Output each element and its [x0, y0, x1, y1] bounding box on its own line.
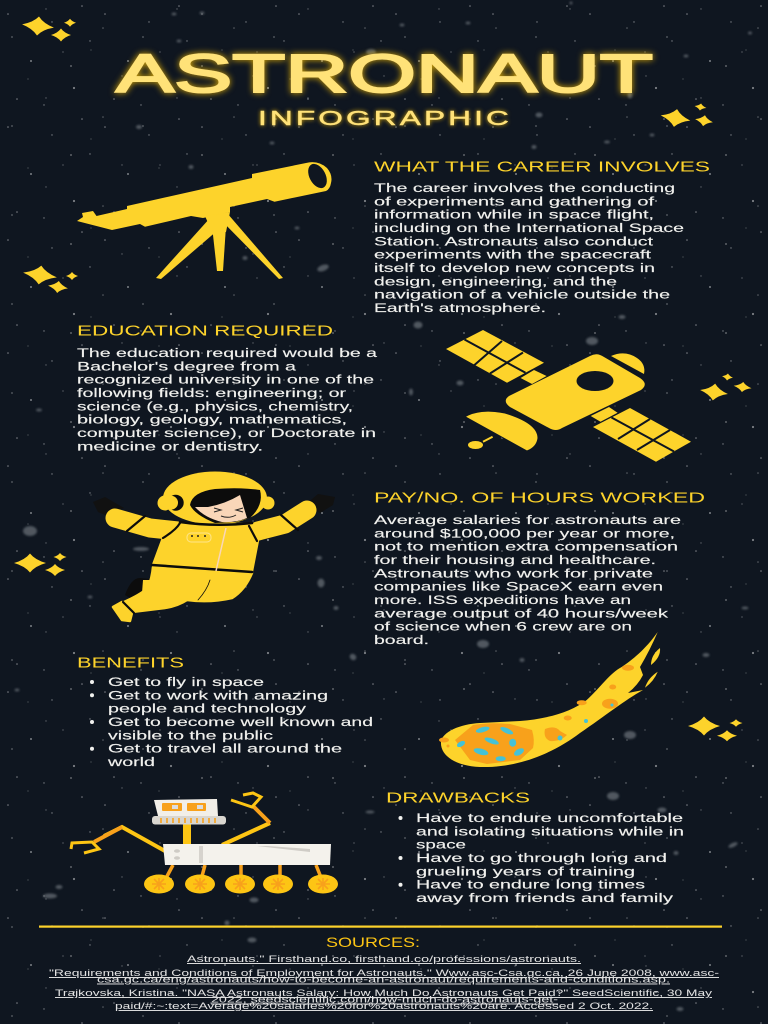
list: benefits: world: [106, 755, 155, 769]
text: source citations: 2022, seedscientific.com/how-much-do-astronauts-get-: [211, 994, 558, 1006]
text: career description: [374, 181, 684, 315]
text: career description: Station. Astronauts also conduct: [374, 234, 654, 248]
heading: sources: SOURCES:: [326, 934, 420, 950]
comet core: [455, 723, 534, 764]
list: benefits: Get to work with amazing: [108, 688, 328, 702]
heading: pay and hours worked: PAY/NO. OF HOURS WORKED: [374, 490, 705, 506]
text: education description: medicine or dentistry.: [77, 439, 263, 453]
text: source citations: csa.gc.ca/eng/astronauts/how-to-become-an-astronaut/requirements-and-conditions.asp.: [97, 974, 670, 986]
text: education description: recognized university in one of the: [77, 373, 374, 387]
subtitle: INFOGRAPHIC: [258, 107, 512, 130]
gloves: [93, 497, 124, 515]
text: pay description: not to mention extra compensation: [374, 540, 678, 554]
list: benefits: [90, 675, 373, 769]
list: drawbacks: Have to endure uncomfortable: [416, 811, 683, 825]
title: ASTRONAUT: [116, 44, 653, 104]
icon: sparkles by comet: [688, 716, 742, 741]
list: drawbacks: grueling years of training: [416, 864, 635, 878]
list: drawbacks: space: [416, 838, 466, 852]
suit lines: [123, 515, 298, 613]
text: pay description: companies like SpaceX earn even: [374, 580, 663, 594]
list: drawbacks: [398, 811, 684, 905]
suit: [113, 510, 307, 621]
text: source citations: "Requirements and Conditions of Employment for Astronauts." Www.asc-Csa.gc.ca, 26 June 2008, www.asc-: [49, 968, 719, 979]
text: education description: The education required would be a: [77, 346, 377, 360]
rover wheels: [144, 874, 338, 894]
list: benefits: visible to the public: [108, 728, 273, 742]
list: drawbacks: Have to endure long times: [416, 878, 645, 892]
text: education description: following fields: engineering; or: [77, 386, 346, 400]
icon: sparkles top right: [659, 103, 714, 129]
zipper: [216, 528, 226, 571]
chest badge: [187, 533, 211, 542]
rover arms: [71, 793, 270, 853]
heading: benefits: BENEFITS: [77, 654, 184, 672]
text: career description: itself to develop new concepts in: [374, 261, 655, 275]
text: career description: information while in space flight,: [374, 208, 654, 222]
rover head: [154, 799, 218, 816]
text: source citations: paid/#:~:text=Average%20salaries%20for%20astronauts%20are. Accessed 2 Oct. 2022.: [115, 1001, 653, 1012]
list: benefits: Get to travel all around the: [108, 742, 342, 756]
text: career description: of experiments and gathering of: [374, 194, 655, 208]
rover body: [163, 844, 331, 865]
back boot: [125, 578, 150, 600]
icon: sparkles by astronaut: [14, 553, 66, 576]
visor and face: [190, 488, 261, 523]
text: pay description: Astronauts who work for private: [374, 566, 653, 580]
text: pay description: Average salaries for astronauts are: [374, 513, 681, 527]
text: education description: [77, 346, 377, 453]
heading: education required: EDUCATION REQUIRED: [77, 322, 333, 340]
list: benefits: Get to fly in space: [108, 675, 264, 689]
text: source citations: Trajkovska, Kristina. "NASA Astronauts Salary: How Much Do Astronauts Get Paid?" SeedScientific, 30 May: [55, 988, 712, 999]
icon: sparkles by satellite: [699, 373, 752, 402]
list: benefits: people and technology: [108, 702, 307, 716]
heading: drawbacks: DRAWBACKS: [386, 790, 530, 806]
text: career description: The career involves the conducting: [374, 181, 675, 195]
text: pay description: average output of 40 hours/week: [374, 606, 669, 620]
text: pay description: [374, 513, 681, 647]
text: education description: biology, geology, mathematics,: [77, 413, 347, 427]
text: pay description: more. ISS expeditions have an: [374, 593, 631, 607]
helmet: [163, 472, 267, 524]
text: career description: experiments with the spacecraft: [374, 248, 652, 262]
list: benefits: Get to become well known and: [108, 715, 373, 729]
icon: sparkles by telescope: [22, 263, 78, 294]
text: career description: Earth's atmosphere.: [374, 301, 546, 315]
text: source citations: [49, 954, 719, 1012]
text: pay description: of science when 6 crew are on: [374, 620, 632, 634]
heading: what the career involves: WHAT THE CAREER INVOLVES: [374, 158, 710, 176]
text: career description: navigation of a vehicle outside the: [374, 288, 670, 302]
list: drawbacks: Have to go through long and: [416, 851, 667, 865]
text: education description: Bachelor's degree from a: [77, 359, 296, 373]
icon: satellite: [446, 330, 691, 462]
text: career description: design, engineering, and the: [374, 274, 617, 288]
rover legs: [165, 865, 322, 880]
icon: sparkles top left: [21, 15, 76, 42]
rover neck: [183, 823, 191, 846]
list: drawbacks: away from friends and family: [416, 891, 674, 905]
icon: comet: [439, 632, 660, 767]
icon: astronaut: [93, 472, 335, 621]
text: career description: including on the International Space: [374, 221, 684, 235]
text: education description: science (e.g., physics, chemistry,: [77, 399, 353, 413]
text: pay description: around $100,000 per year or more,: [374, 526, 675, 540]
text: education description: computer science), or Doctorate in: [77, 426, 376, 440]
list: drawbacks: and isolating situations while in: [416, 824, 684, 838]
text: source citations: Astronauts." Firsthand.co, firsthand.co/professions/astronauts.: [187, 954, 581, 965]
text: pay description: board.: [374, 633, 429, 647]
icon: telescope: [77, 161, 332, 279]
text: pay description: for their housing and healthcare.: [374, 553, 656, 567]
icon: rover: [71, 793, 338, 894]
